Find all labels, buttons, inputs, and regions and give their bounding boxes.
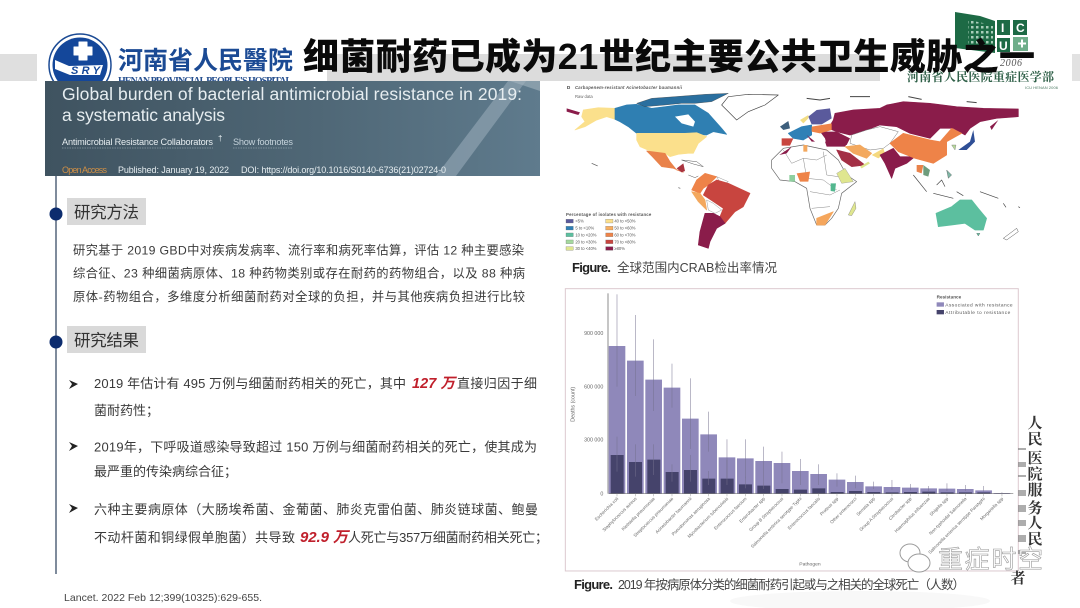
vertical side text bbox=[1010, 416, 1043, 587]
y axis bbox=[571, 293, 609, 497]
map legend: 50 to <60% bbox=[614, 226, 636, 231]
ICU logo: 2006 bbox=[1000, 58, 1022, 69]
x axis: Enterococcus faecalis bbox=[787, 496, 822, 531]
text block: methods: 综合征、23 种细菌病原体、18 种药物类别或存在耐药的药物组合，以及 88 种病 bbox=[73, 266, 525, 280]
x axis: Salmonella enterica serotype Typhi bbox=[750, 496, 803, 549]
text block: methods: 研究基于 2019 GBD中对疾病发病率、流行率和病死率估算，评估 12 种主要感染 bbox=[73, 242, 524, 258]
x axis: Group B Streptococcus bbox=[748, 496, 785, 532]
authors: Antimicrobial Resistance Collaborators bbox=[62, 137, 213, 147]
panel: bar chart bbox=[565, 289, 1018, 571]
chart legend: Associated with resistance bbox=[945, 302, 1013, 308]
x axis: Salmonella enterica serotype Paratyphi bbox=[927, 496, 986, 555]
bullet list: results bbox=[69, 376, 548, 546]
map legend: Percentage of isolates with resistance bbox=[566, 212, 652, 217]
watermark bbox=[900, 544, 1043, 574]
x axis: Other enterococci bbox=[829, 496, 858, 525]
header gray band bbox=[0, 54, 1080, 81]
chart legend: Resistance bbox=[937, 294, 962, 299]
bars: attributable to resistance bbox=[611, 455, 1009, 494]
vertical side text: 院 bbox=[1027, 465, 1043, 483]
map legend: 5 to <10% bbox=[575, 226, 594, 231]
watermark: 重症时空 bbox=[938, 546, 1043, 574]
map title: D bbox=[567, 85, 571, 90]
vertical side text: 民 bbox=[1027, 431, 1043, 448]
map title: Carbapenem-resistant Acinetobacter baumannii bbox=[575, 85, 683, 90]
world map bbox=[566, 85, 1020, 251]
text block: methods bbox=[73, 242, 525, 304]
ICU logo bbox=[907, 12, 1059, 90]
bullet 2: 2019年，下呼吸道感染导致超过 150 万例与细菌耐药相关的死亡，使其成为 bbox=[94, 440, 537, 454]
vertical side text: 人 bbox=[1027, 416, 1043, 432]
x axis: Non-typhoidal Salmonella bbox=[928, 496, 968, 536]
paper title bbox=[62, 84, 522, 125]
authors bbox=[62, 134, 293, 148]
citation: Lancet. 2022 Feb 12;399(10325):629-655. bbox=[64, 592, 262, 604]
authors: Show footnotes bbox=[233, 137, 293, 147]
panel: paper header bbox=[45, 81, 540, 176]
ICU logo: I bbox=[1001, 21, 1004, 35]
x axis bbox=[594, 494, 1013, 568]
x axis: Escherichia coli bbox=[594, 496, 619, 522]
bullet 3: 不动杆菌和铜绿假单胞菌）共导致 bbox=[94, 530, 295, 545]
map: europe africa asia oceania bbox=[772, 97, 1020, 240]
authors: † bbox=[218, 134, 222, 143]
vertical side text: 者 bbox=[1010, 569, 1026, 587]
map legend: ≥80% bbox=[614, 246, 625, 251]
map caption: 全球范围内CRAB检出率情况 bbox=[617, 260, 777, 275]
map caption: Figure. bbox=[572, 260, 611, 275]
paper title: Global burden of bacterial antimicrobial resistance in 2019: bbox=[62, 84, 522, 104]
x axis: Enterobacter spp bbox=[738, 496, 766, 524]
x axis: Group A Streptococcus bbox=[858, 496, 895, 532]
y axis: 600 000 bbox=[584, 384, 603, 390]
x axis: Enterococcus faecium bbox=[713, 496, 748, 531]
bullet 2 bbox=[69, 440, 537, 480]
vertical side text: 人 bbox=[1027, 516, 1043, 532]
publication info: Published: January 19, 2022 bbox=[118, 165, 229, 175]
x axis: Mycobacterium tuberculosis bbox=[687, 496, 730, 539]
x axis: Serratia spp bbox=[855, 496, 876, 517]
x axis: Haemophilus influenzae bbox=[894, 496, 931, 534]
error bars bbox=[617, 294, 1002, 493]
map title bbox=[567, 85, 683, 99]
ICU logo: 河南省人民医院重症医学部 bbox=[907, 69, 1054, 84]
y axis: 0 bbox=[600, 491, 603, 497]
chart legend bbox=[937, 294, 1013, 316]
hospital logo bbox=[49, 34, 111, 96]
y axis: 900 000 bbox=[584, 331, 603, 337]
bullet 1: 127 万 bbox=[412, 376, 458, 392]
map legend: 70 to <80% bbox=[614, 239, 636, 244]
icon: wechat bubbles bbox=[900, 544, 930, 572]
map legend: 20 to <30% bbox=[575, 239, 597, 244]
x axis: Shigella spp bbox=[929, 496, 950, 517]
ICU logo: ICU HENAN 2006 bbox=[1025, 85, 1059, 90]
bullet 1 bbox=[69, 376, 537, 419]
bars: associated with resistance bbox=[609, 346, 1010, 494]
hospital name: HENAN PROVINCIAL PEOPLE'S HOSPITAL bbox=[118, 76, 292, 87]
bullet 3: 人死亡与357万细菌耐药相关死亡； bbox=[348, 530, 548, 546]
chart caption: 2019 年按病原体分类的细菌耐药引起或与之相关的全球死亡（人数） bbox=[618, 577, 965, 592]
y axis: Deaths (count) bbox=[571, 387, 577, 422]
bullet 3 bbox=[69, 502, 548, 546]
heading: research methods: 研究方法 bbox=[74, 203, 139, 222]
vertical side text: 务 bbox=[1027, 499, 1043, 517]
x axis: Klebsiella pneumoniae bbox=[621, 496, 656, 532]
heading: research methods bbox=[67, 198, 146, 225]
map legend: <5% bbox=[575, 219, 584, 224]
ICU logo: U bbox=[999, 39, 1008, 53]
bullet 1: 菌耐药性； bbox=[94, 403, 159, 419]
map legend: 30 to <40% bbox=[575, 246, 597, 251]
vertical side text: 服 bbox=[1027, 482, 1043, 499]
publication info: Open Access bbox=[62, 165, 108, 175]
x axis: Staphylococcus aureus bbox=[601, 496, 638, 532]
map legend bbox=[566, 212, 652, 251]
bullet 3: 92.9 万 bbox=[300, 529, 351, 546]
map: americas bbox=[567, 93, 778, 248]
chart legend: Attributable to resistance bbox=[945, 310, 1011, 316]
bullet 1: 直接归因于细 bbox=[457, 376, 537, 391]
text block: methods: 原体-药物组合，多维度分析细菌耐药对全球的负担，并与其他疾病负担进行比较 bbox=[73, 289, 525, 304]
map title: Raw data bbox=[575, 94, 593, 99]
x axis: Streptococcus pneumoniae bbox=[632, 496, 675, 538]
hospital name: 河南省人民醫院 bbox=[118, 47, 293, 75]
bullet 2: 最严重的传染病综合征； bbox=[94, 464, 237, 480]
x axis: Proteus spp bbox=[819, 496, 840, 517]
timeline bbox=[50, 176, 62, 574]
publication info: DOI: https://doi.org/10.1016/S0140-6736(21)02724-0 bbox=[241, 165, 446, 175]
map legend: 40 to <50% bbox=[614, 219, 636, 224]
map legend: 60 to <70% bbox=[614, 232, 636, 237]
title: 细菌耐药已成为21世纪主要公共卫生威胁之一 bbox=[303, 36, 1035, 77]
chart caption: Figure. bbox=[574, 577, 613, 592]
map legend: 10 to <20% bbox=[575, 232, 597, 237]
x axis: Pseudomonas aeruginosa bbox=[671, 496, 711, 537]
x axis: Acinetobacter baumannii bbox=[654, 496, 693, 535]
publication info bbox=[62, 165, 446, 175]
bullet 1: 2019 年估计有 495 万例与细菌耐药相关的死亡，其中 bbox=[94, 376, 406, 391]
vertical side text: 民 bbox=[1027, 531, 1043, 548]
ICU logo: C bbox=[1016, 21, 1025, 35]
bullet 3: 六种主要病原体（大肠埃希菌、金葡菌、肺炎克雷伯菌、肺炎链球菌、鲍曼 bbox=[94, 502, 538, 517]
paper title: a systematic analysis bbox=[62, 105, 225, 125]
vertical side text: 医 bbox=[1027, 450, 1043, 467]
heading: research results: 研究结果 bbox=[74, 331, 139, 350]
x axis: Citrobacter spp bbox=[888, 496, 913, 521]
hospital logo: SRY bbox=[71, 65, 102, 77]
y axis: 300 000 bbox=[584, 438, 603, 444]
heading: research results bbox=[67, 326, 146, 353]
x axis: Pathogen bbox=[799, 562, 821, 568]
x axis: Morganella spp bbox=[979, 496, 1005, 521]
